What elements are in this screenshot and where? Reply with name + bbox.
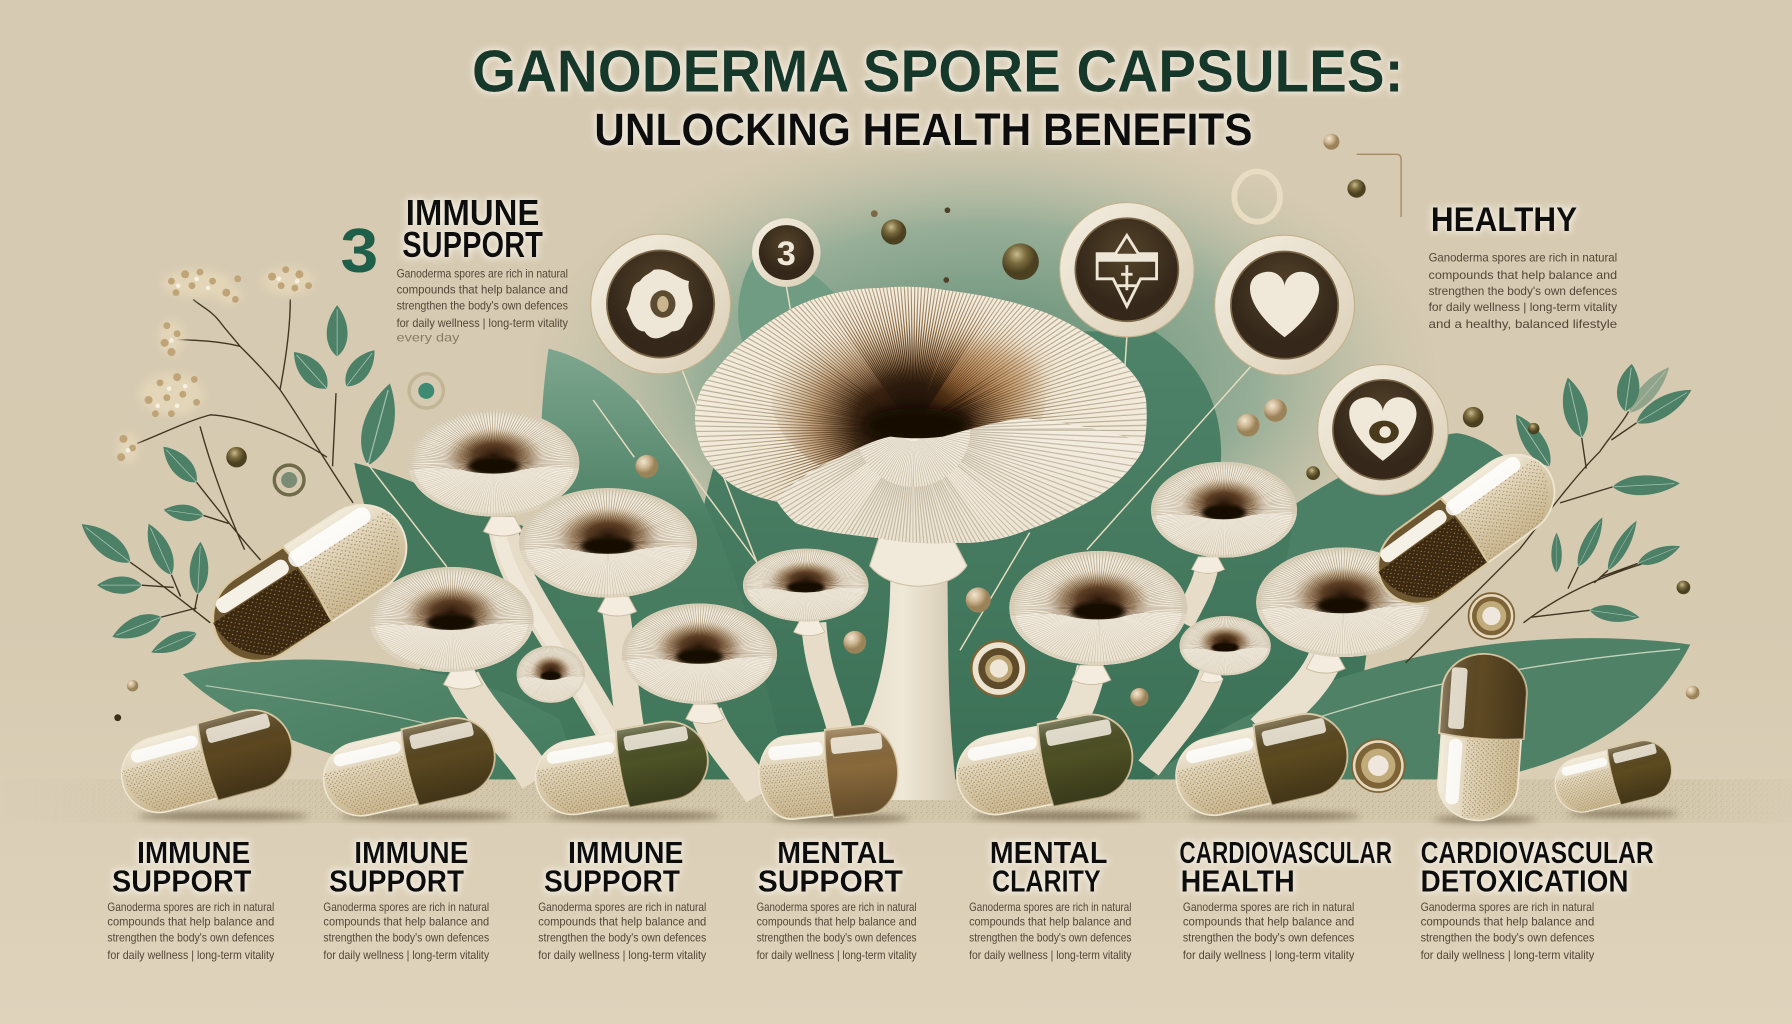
body text: for daily wellness | long-term vitality	[969, 948, 1131, 962]
body text: strengthen the body's own defences	[397, 299, 568, 313]
title line 2: UNLOCKING HEALTH BENEFITS	[594, 104, 1253, 155]
mushroom rings: small	[443, 517, 1345, 723]
body text: strengthen the body's own defences	[1421, 931, 1594, 945]
left botanical branch	[75, 266, 404, 660]
mushroom 7	[1009, 551, 1187, 665]
body text: for daily wellness | long-term vitality	[323, 948, 489, 962]
capsule row 1	[113, 701, 301, 823]
mushroom 5	[743, 549, 869, 622]
heading: MENTAL	[990, 835, 1107, 870]
body text	[757, 900, 917, 962]
body text: for daily wellness | long-term vitality	[1183, 948, 1354, 962]
body text: compounds that help balance and	[757, 915, 917, 929]
body text	[1183, 900, 1354, 962]
heading	[402, 192, 543, 265]
mushroom 11	[517, 646, 585, 703]
heading: SUPPORT	[402, 224, 543, 265]
body text: compounds that help balance and	[1183, 915, 1354, 929]
capsule row 3	[529, 715, 714, 823]
body text: compounds that help balance and	[1421, 915, 1594, 929]
heading: HEALTH	[1181, 863, 1295, 898]
body text: every day	[397, 331, 459, 345]
body text: strengthen the body's own defences	[757, 931, 917, 945]
coin icon right	[1469, 593, 1514, 639]
leaves: left branch	[75, 305, 404, 660]
heading: IMMUNE	[354, 835, 469, 870]
right botanical branch	[1406, 362, 1696, 663]
capsule ground shadows	[137, 810, 1678, 823]
connector lines	[367, 286, 1251, 650]
leaf: bottom left	[183, 659, 583, 789]
heading: SUPPORT	[758, 863, 903, 898]
body text: Ganoderma spores are rich in natural	[107, 900, 274, 914]
body text: for daily wellness | long-term vitality	[1421, 948, 1594, 962]
mushroom 4	[369, 567, 534, 672]
body text: strengthen the body's own defences	[107, 931, 274, 945]
small coin icons	[971, 593, 1514, 792]
body text: strengthen the body's own defences	[538, 931, 706, 945]
body text	[1429, 251, 1617, 331]
heading: IMMUNE	[406, 192, 539, 233]
mushroom stems: small	[463, 526, 1326, 794]
body text	[1421, 900, 1594, 962]
heading: DETOXICATION	[1421, 863, 1629, 898]
text block: top left immune support	[341, 192, 568, 345]
heading: IMMUNE	[568, 835, 683, 870]
body text: Ganoderma spores are rich in natural	[323, 900, 489, 914]
icon badge: number 3	[752, 218, 821, 287]
body text: for daily wellness | long-term vitality	[397, 316, 568, 330]
body text: for daily wellness | long-term vitality	[107, 948, 274, 962]
body text: compounds that help balance and	[397, 283, 568, 297]
capsule upper left	[196, 487, 424, 679]
body text: Ganoderma spores are rich in natural	[757, 900, 917, 914]
heading	[1421, 835, 1654, 898]
heading: HEALTHY	[1431, 201, 1577, 239]
leaf: behind number badge	[738, 257, 857, 343]
heading: CARDIOVASCULAR	[1179, 835, 1392, 870]
capsule upper right	[1362, 438, 1571, 620]
title line 1: GANODERMA SPORE CAPSULES:	[472, 37, 1403, 104]
heading	[112, 835, 252, 898]
mushroom 9	[1256, 547, 1430, 657]
mushroom 2	[408, 409, 579, 517]
bracket ornament	[1357, 154, 1401, 217]
column 4: mental support	[757, 835, 917, 962]
number marker: 3	[341, 217, 378, 286]
green background glow	[526, 126, 1440, 629]
body text	[107, 900, 274, 962]
body text: strengthen the body's own defences	[323, 931, 489, 945]
icon badge: immune	[591, 234, 731, 374]
icon badge: heart with symbol	[1318, 365, 1448, 495]
leaf: bottom right	[1143, 638, 1690, 793]
body text: Ganoderma spores are rich in natural	[397, 267, 568, 281]
column 5: mental clarity	[969, 835, 1131, 962]
column 1: immune support	[107, 835, 274, 962]
body text: Ganoderma spores are rich in natural	[969, 900, 1131, 914]
heading: SUPPORT	[544, 863, 680, 898]
large mushroom stem	[848, 577, 958, 800]
ground	[0, 779, 1792, 823]
body text: for daily wellness | long-term vitality	[538, 948, 706, 962]
mushroom 6	[622, 603, 777, 704]
body text	[323, 900, 489, 962]
leaf: left of capsule	[343, 463, 560, 789]
capsules	[113, 438, 1678, 825]
heading	[1179, 835, 1392, 898]
capsule row 5	[950, 707, 1140, 824]
coin icon centre	[971, 641, 1026, 696]
background foliage	[183, 257, 1690, 793]
capsule upright	[1433, 651, 1529, 823]
heading: CLARITY	[992, 863, 1101, 898]
title	[472, 37, 1403, 155]
body text: Ganoderma spores are rich in natural	[1429, 251, 1617, 265]
heading: IMMUNE	[137, 835, 250, 870]
body text: strengthen the body's own defences	[969, 931, 1131, 945]
body text: Ganoderma spores are rich in natural	[538, 900, 706, 914]
column 2: immune support	[323, 835, 489, 962]
heading: SUPPORT	[112, 863, 252, 898]
heading	[329, 835, 469, 898]
body text: compounds that help balance and	[538, 915, 706, 929]
mushroom caps: small	[369, 409, 1430, 704]
leaves: right branch	[1507, 362, 1696, 625]
coin icon bottom	[1352, 739, 1405, 792]
capsule row 4	[755, 723, 902, 825]
leaf: behind right capsule	[1280, 433, 1517, 640]
ring ornament	[1234, 171, 1280, 222]
column 3: immune support	[538, 835, 706, 962]
column 6: cardiovascular health	[1179, 835, 1392, 962]
heading	[544, 835, 683, 898]
column 7: cardiovascular detoxication	[1421, 835, 1654, 962]
large mushroom cap	[695, 286, 1147, 544]
body text	[538, 900, 706, 962]
heading: CARDIOVASCULAR	[1421, 835, 1654, 870]
icon badge: number 3: 3	[777, 235, 796, 273]
text block: top right healthy	[1429, 201, 1617, 331]
body text: Ganoderma spores are rich in natural	[1183, 900, 1354, 914]
heading	[990, 835, 1107, 898]
body text: for daily wellness | long-term vitality	[757, 948, 917, 962]
flowers: dried sprays	[117, 266, 313, 463]
heading: SUPPORT	[329, 863, 464, 898]
body text: compounds that help balance and	[969, 915, 1131, 929]
leaf: central mass	[684, 331, 1373, 789]
capsule row 2	[316, 710, 503, 825]
heading	[758, 835, 903, 898]
icon badge: heart	[1215, 235, 1355, 375]
mushroom 8	[1151, 462, 1297, 558]
body text	[969, 900, 1131, 962]
body text: compounds that help balance and	[1429, 268, 1617, 282]
mushroom: large central	[686, 258, 1154, 800]
body text: Ganoderma spores are rich in natural	[1421, 900, 1594, 914]
capsule row 7	[1549, 735, 1678, 819]
icon badge: shield	[1060, 203, 1194, 337]
body text: strengthen the body's own defences	[1429, 284, 1617, 298]
mushroom 3	[519, 488, 697, 598]
body text	[397, 267, 568, 345]
decorative beads and rings	[114, 134, 1699, 721]
mushroom 10	[1179, 616, 1271, 675]
body text: strengthen the body's own defences	[1183, 931, 1354, 945]
heading: MENTAL	[777, 835, 895, 870]
large mushroom ring	[870, 535, 967, 586]
body text: compounds that help balance and	[107, 915, 274, 929]
leaf: upper left large	[537, 349, 789, 789]
body text: and a healthy, balanced lifestyle	[1429, 317, 1617, 331]
body text: for daily wellness | long-term vitality	[1429, 300, 1617, 314]
body text: compounds that help balance and	[323, 915, 489, 929]
capsule row 6	[1168, 706, 1356, 825]
